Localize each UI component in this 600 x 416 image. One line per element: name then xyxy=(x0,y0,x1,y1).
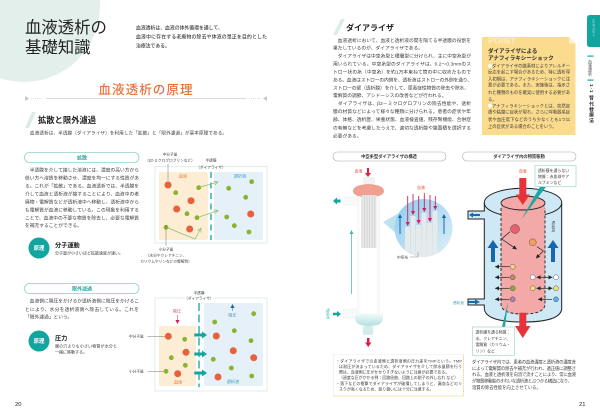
intro text xyxy=(136,25,267,50)
mass transfer paragraph: によって電解質の除去や補充が行われ、適正値に調整さ xyxy=(472,365,576,372)
panel: POINT callout: 状や血圧低下などのうち少なくとも1つ以 xyxy=(488,116,571,123)
pill heading: ultrafiltration: 限外濾過 xyxy=(72,285,92,292)
mass transfer paragraph: ダイアライザ内では、患者の血液濃度と透析液の濃度差 xyxy=(472,358,577,366)
diffusion paragraph: 低い方へ溶質を移動させ、濃度を均一にする性質があ xyxy=(25,175,139,182)
subheading: diffusion and ultrafiltration xyxy=(25,112,97,128)
principle: pressure: 一緒に移動する。 xyxy=(55,348,87,354)
pill heading: mass transfer: ダイアライザ内の物質移動 xyxy=(493,153,545,160)
title: 基礎知識 xyxy=(25,39,91,57)
chart: diffusion diagram: 透析液 xyxy=(234,173,247,180)
callout: cautions note: （過度な圧がかかる例：回路屈曲、回路上の鉗子の外し忘れ など） xyxy=(339,375,458,380)
cylinder diagram xyxy=(453,168,562,338)
chart: diffusion diagram: 血液 xyxy=(179,173,188,180)
panel: POINT callout xyxy=(482,36,576,135)
callout: impermeable substances: 透析膜を通らない xyxy=(538,168,569,173)
diffusion paragraph: も電解質が血液に移動している。この現象を利用する xyxy=(25,206,139,213)
subheading: dialyzer: ダイアライザ xyxy=(346,22,394,32)
connector wedges xyxy=(521,187,546,220)
chart: ultrafiltration diagram: 陽圧 xyxy=(173,308,181,314)
decorative mint circle xyxy=(0,0,100,82)
ultrafiltration paragraph: 「限外濾過」という。 xyxy=(25,314,72,321)
chart: diffusion diagram: （水分やクレアチニン、 xyxy=(146,252,186,257)
chapter tab: CHAPTER 4 xyxy=(592,19,596,37)
intro text: 血液中に存在する老廃物の除去や体液の是正を目的とした xyxy=(136,34,267,41)
chart: ultrafiltration diagram: （ダイアライザ） xyxy=(184,296,214,300)
dialyzer paragraph: トロー状の糸（中空糸）を約1万本束ねて筒の中に収めたもので xyxy=(333,68,471,75)
panel: mass transfer in dialyzer xyxy=(453,152,577,391)
dialyzer paragraph xyxy=(333,37,472,139)
dialyzer paragraph: 用いられている。中空糸型のダイアライザは、0.2～0.3mmのス xyxy=(333,60,471,67)
dialyzer paragraph: 齢、体格、透析歴、栄養状態、血液検査値、残存腎機能、合併症 xyxy=(333,116,471,123)
label: dialysate: 透析液 xyxy=(325,307,330,320)
panel: POINT callout: ダイアライザによる xyxy=(488,47,537,55)
ultrafiltration paragraph: 血液側に陽圧をかけるか透析液側に陰圧をかけるこ xyxy=(25,298,139,305)
chart: diffusion diagram: 小分子量 xyxy=(159,246,174,251)
mass transfer paragraph xyxy=(472,358,577,391)
chart: diffusion diagram: カリウムやリンなどの電解質） xyxy=(140,258,192,263)
principle: molecular motion: 分子運動 xyxy=(55,241,80,249)
callout: permeable substances: 電解質（カリウム・ xyxy=(476,342,511,347)
cylinder diagram: 透析液 xyxy=(551,220,556,232)
chart: ultrafiltration diagram: 小分子量 xyxy=(129,369,144,374)
icon: blood out arrow xyxy=(365,338,372,347)
dialyzer paragraph: 膜の材質などによって様々な種類に分けられる。患者の症状や年 xyxy=(333,108,471,115)
callout: cautions note: ・落下などの衝撃でダイアライザが破損してしまうと、漏血などのリ xyxy=(336,381,462,386)
icon: dialysate arrows xyxy=(333,198,352,317)
panel: POINT callout: 入初期は、アナフィラキシーショックに注 xyxy=(488,76,571,82)
page number left: 20 xyxy=(15,402,21,408)
diffusion paragraph: る。これが「拡散」である。血液透析では、半透膜を xyxy=(25,183,139,190)
callout: permeable substances: リン）など xyxy=(476,348,495,353)
cylinder diagram: 透析液 xyxy=(453,300,464,305)
cylinder diagram: 血液 xyxy=(519,168,527,174)
dialyzer paragraph: ダイアライザは中空糸型と積層型に分けられ、主に中空糸型が xyxy=(333,52,471,59)
dialyzer paragraph: 必要がある。 xyxy=(333,132,362,139)
icon: filtration arrows xyxy=(194,332,207,376)
diffusion paragraph: 介して血液と透析液が接することにより、血液中の老 xyxy=(25,190,139,197)
panel: POINT callout: 上の症状がある場合のことをいう。 xyxy=(488,123,556,130)
chart: diffusion diagram xyxy=(140,151,267,263)
subheading: diffusion and ultrafiltration: 拡散と限外濾過 xyxy=(38,115,97,125)
panel: POINT callout: れた種類のものを確実に使用する必要があ xyxy=(488,89,570,96)
page number right: 21 xyxy=(579,402,585,408)
chart: ultrafiltration diagram: 中分子量 xyxy=(129,334,144,339)
callout: impermeable substances xyxy=(535,166,576,187)
chart: diffusion diagram: 中分子量 xyxy=(163,151,178,156)
panel: POINT callout: 意が必要である。また、実施後は、指示さ xyxy=(488,82,570,89)
chapter tab xyxy=(587,15,600,47)
pill heading: diffusion: 拡散 xyxy=(77,154,87,161)
label: blood in: 血液 xyxy=(354,168,362,174)
mass transfer paragraph: が物質移動能のきれいな透析液とぶつかる構造になり、 xyxy=(472,378,572,384)
title: 血液透析の xyxy=(25,19,107,37)
callout: permeable substances xyxy=(472,327,514,355)
diffusion paragraph: 廃物・電解質などが透析液中へ移動し、透析液中から xyxy=(25,198,139,205)
pill heading: mass transfer xyxy=(462,152,576,161)
panel: diffusion text xyxy=(24,152,139,258)
magnified fibers circle: 中空糸 xyxy=(397,254,408,260)
panel: POINT callout: アナフィラキシーショック xyxy=(488,54,554,62)
callout: cautions note: 際は、血液側に圧がかかりすぎないように注意が必要である。 xyxy=(339,370,449,375)
chart: ultrafiltration diagram: 血液 xyxy=(174,378,183,386)
ultrafiltration paragraph: とにより、水分を透析液側へ除去している。これを xyxy=(25,306,139,313)
chart: diffusion diagram: （β2-ミクログロブリンなど） xyxy=(145,158,195,162)
intro text: 血液透析は、血液の体外循環を通して、 xyxy=(136,25,223,32)
principle: pressure xyxy=(28,330,117,354)
callout: cautions note xyxy=(334,354,464,396)
panel: hollow fiber dialyzer xyxy=(325,152,464,396)
panel: POINT callout: アナフィラキシーショックとは、突然皮 xyxy=(492,102,571,110)
chart: ultrafiltration diagram xyxy=(129,289,267,391)
callout: cautions note: ・ダイアライザでの血液側と透析液側の圧力差をTMPという。TMP xyxy=(336,358,462,363)
diffusion paragraph: を補充することができる。 xyxy=(25,222,82,229)
principle: molecular motion: 分子量が小さいほど拡散速度が速い。 xyxy=(55,250,123,256)
dialyzer paragraph: ある。血液はストローの内側を、透析液はストローの外側を通り、 xyxy=(333,77,472,84)
panel: POINT callout: る。 xyxy=(488,97,497,102)
panel: POINT callout: 反応を起こす場合があるため、特に透析導 xyxy=(488,69,571,76)
blood arrows xyxy=(516,178,530,205)
dialyzer paragraph: ストローの壁（透析膜）を介して、尿毒症性物質の除去や除水、 xyxy=(333,85,469,92)
dialyzer body xyxy=(344,177,384,335)
panel: ultrafiltration text xyxy=(24,284,139,354)
magnified fibers circle: 血液 xyxy=(417,184,425,190)
section heading: principle xyxy=(25,83,267,101)
side navigation xyxy=(587,56,594,124)
side navigation: 1-1 腎代替療法 xyxy=(588,84,594,124)
icon: blood in arrow xyxy=(365,168,371,177)
chart: ultrafiltration diagram: 透析液 xyxy=(227,378,240,385)
principle: pressure: 膜の穴よりも小さい物質が水分と xyxy=(55,342,117,348)
panel: POINT callout: ダイアライザの膜素材によりアレルギー xyxy=(492,62,570,70)
chart: diffusion diagram: 半透膜 xyxy=(205,157,217,162)
principle: molecular motion: 原理 xyxy=(34,245,45,252)
solutes xyxy=(510,224,558,302)
principle: pressure: 圧力 xyxy=(55,334,67,342)
callout: cautions note: は耐圧が決まっているため、ダイアライザを介して除水量積を行う xyxy=(339,364,462,369)
title xyxy=(25,19,107,57)
dialyzer paragraph: 電解質の調節、アシドーシスの改善などが行われる。 xyxy=(333,92,446,99)
callout: permeable substances: 透析膜を通る物質： xyxy=(476,329,511,334)
mass transfer paragraph: れる。血液と透析液を向流で流すことにより、常に血液 xyxy=(472,371,577,378)
side navigation: 血液透析 xyxy=(587,59,592,77)
section heading: principle: 血液透析の原理 xyxy=(98,83,194,97)
callout: impermeable substances: 物質：赤血球やア xyxy=(538,174,569,179)
diffusion paragraph xyxy=(25,167,139,229)
diffusion paragraph: ことで、血液中の不要な物質を除去し、必要な電解質 xyxy=(25,214,139,221)
callout: permeable substances: 水、クレアチニン、 xyxy=(476,336,510,341)
transfer arrows xyxy=(495,232,552,299)
magnified fibers circle xyxy=(383,184,452,260)
chart: ultrafiltration diagram: 半透膜 xyxy=(193,290,205,295)
panel: POINT callout: POINT xyxy=(488,36,516,46)
lead text: 血液透析は、半透膜（ダイアライザ）を利用した「拡散」と「限外濾過」が基本原理である。 xyxy=(30,130,227,137)
mass transfer paragraph: 溶質の除去性能を向上させている。 xyxy=(472,384,541,391)
principle: molecular motion xyxy=(28,238,123,258)
chart: ultrafiltration diagram: 陰圧 xyxy=(228,312,237,318)
chart: diffusion diagram: （ダイアライザ） xyxy=(196,164,226,169)
subheading: dialyzer xyxy=(333,19,394,35)
diffusion paragraph: 半透膜を介して接した溶液には、濃度の高い方から xyxy=(25,167,139,174)
dialyzer paragraph: 果たしているのが、ダイアライザである。 xyxy=(333,45,423,52)
dialyzer paragraph: ダイアライザは、β2－ミクログロブリンの除去性能や、透析 xyxy=(333,100,471,107)
callout: impermeable substances: ルブミンなど xyxy=(538,180,561,185)
pill heading: dialyzer structure: 中空糸型ダイアライザの構造 xyxy=(361,153,418,160)
intro text: 治療法である。 xyxy=(136,43,170,50)
dialyzer paragraph: の有無などを考慮したうえで、適切な透析膜や膜面積を選択する xyxy=(333,124,471,131)
pill heading: dialyzer structure xyxy=(333,152,446,161)
dialyzer paragraph: 血液透析において、血液と透析液の間を隔てる半透膜の役割を xyxy=(333,37,471,44)
ultrafiltration paragraph xyxy=(25,298,139,321)
callout: cautions note: スクが高くなるため、取り扱いには十分に注意する。 xyxy=(339,387,434,392)
panel: POINT callout: 膚や粘膜に症状が現れ、さらに呼吸器系症 xyxy=(488,109,571,116)
principle: pressure: 原理 xyxy=(34,338,45,345)
